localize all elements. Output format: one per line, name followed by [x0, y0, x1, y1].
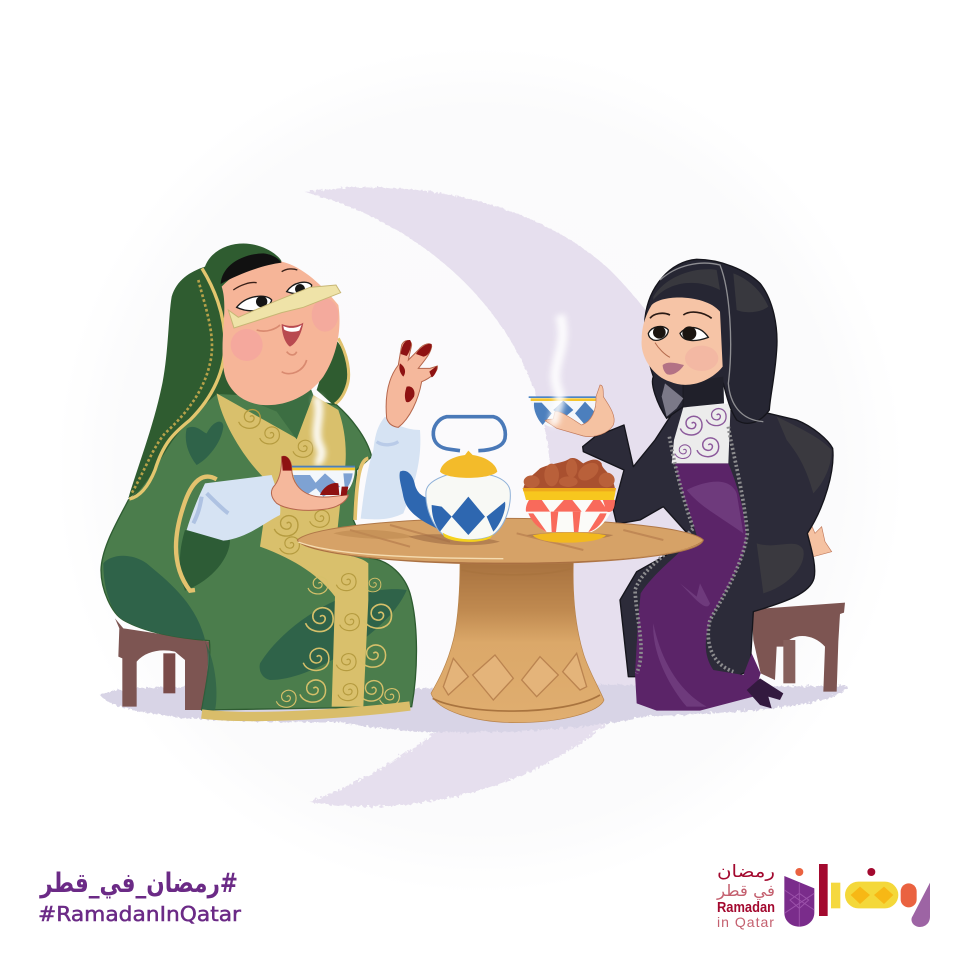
open mouth: [282, 323, 303, 347]
arabic hashtag: #رمضان_في_قطر: [38, 867, 238, 899]
bowl coral pattern: [526, 495, 615, 532]
hair: [221, 253, 282, 284]
sequin trim: [635, 427, 747, 673]
left cup and hand: [271, 456, 355, 510]
logo wordmark: في قطر: [716, 881, 775, 901]
robe shadows: [103, 422, 407, 710]
sleeve opening: [180, 530, 230, 591]
hood sheen: [660, 263, 763, 422]
teapot: [400, 417, 510, 542]
veil gold edge: [129, 268, 225, 499]
ground shadow: [100, 685, 846, 732]
table pedestal: [431, 563, 604, 723]
raised hennaed hand: [386, 340, 437, 427]
logo wordmark: [716, 862, 775, 930]
eyes: [648, 312, 712, 341]
face: [642, 297, 723, 385]
gold embroidered panel: [217, 393, 368, 707]
pedestal diamonds: [443, 653, 587, 700]
abaya highlights: [757, 417, 832, 593]
steam over right cup: [555, 315, 563, 425]
eyes: [233, 269, 312, 311]
logo wordmark: in Qatar: [717, 914, 775, 930]
bowl of dates: [523, 458, 616, 543]
dress folds: [653, 482, 743, 707]
lace panel: [672, 403, 731, 463]
sleeve gold trim: [176, 477, 217, 591]
cheek blush: [231, 329, 263, 361]
smile lines: [257, 325, 307, 374]
ramadan in qatar logo: [716, 862, 930, 930]
burqa mask: [228, 285, 341, 328]
cheek blush: [685, 346, 718, 371]
back hand: [800, 522, 832, 557]
woman on the right in black abaya: [529, 259, 845, 711]
embroidery swirls: [239, 410, 399, 707]
purple dress: [635, 463, 761, 711]
hashtags: [38, 867, 242, 926]
gold hem: [202, 706, 410, 717]
back veil: [128, 244, 349, 498]
neck: [683, 377, 724, 407]
tabletop: [297, 518, 703, 564]
face: [221, 253, 341, 405]
green neck scarf: [245, 387, 313, 439]
left blue undersleeve: [187, 475, 280, 541]
nose and lips: [655, 343, 670, 357]
logo wordmark: رمضان: [717, 862, 775, 882]
table and tableware: [297, 417, 703, 723]
latin hashtag: #RamadanInQatar: [38, 902, 242, 926]
undershawl: [662, 383, 683, 417]
background crescent moon: [305, 187, 713, 806]
left stool: [115, 618, 210, 710]
hood: [645, 259, 777, 423]
right cup and hand: [529, 385, 614, 437]
logo wordmark: Ramadan: [717, 900, 775, 916]
steam over left cup: [317, 397, 322, 465]
green robe: [101, 393, 416, 710]
logo mark: [784, 864, 930, 927]
abaya body: [583, 407, 833, 677]
right blue undersleeve: [361, 417, 420, 519]
right stool: [752, 603, 845, 692]
woman on the left in green robe: [101, 244, 437, 717]
sleeve folds: [193, 493, 228, 523]
shoes: [747, 678, 783, 708]
